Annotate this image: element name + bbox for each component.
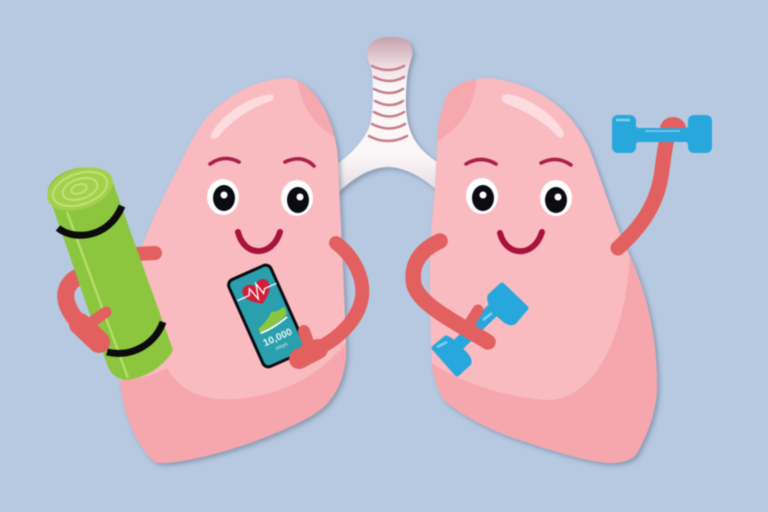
highlight [211,94,274,139]
lower lobe shade [120,344,346,463]
arm behind yoga mat [135,253,155,254]
hand holding mat [80,312,106,342]
right eye [540,180,572,216]
trachea [336,37,442,195]
arm behind mat edge [66,276,80,324]
phone [227,263,307,369]
left lung [120,78,351,468]
shoe [254,306,290,333]
right lung lower arm [413,241,488,342]
eyebrows [466,159,571,165]
right face [466,159,572,251]
smile [500,232,542,251]
blue dumbbell raised [612,115,712,153]
right lung [429,78,662,468]
left face [207,158,314,251]
phone: steps [275,341,289,352]
upper lobe corner shade [298,81,334,137]
right lung raised arm [618,135,668,248]
steps text: 10,000 [262,327,294,349]
left eye [207,179,239,215]
lower lobe shade [432,258,657,463]
left eye [466,178,498,214]
blue dumbbell held low [434,285,526,374]
highlight [502,94,564,137]
yoga mat [41,159,173,380]
left lung arm holding phone [310,243,362,352]
raised arm hand [660,117,686,141]
right eye [281,180,313,216]
heart with pulse [233,274,282,313]
eyebrows [210,158,314,166]
upper lobe corner shade [437,79,476,142]
illustration: smiling lungs exercising [46,36,713,468]
hand on phone [299,331,318,359]
smile [238,232,280,251]
